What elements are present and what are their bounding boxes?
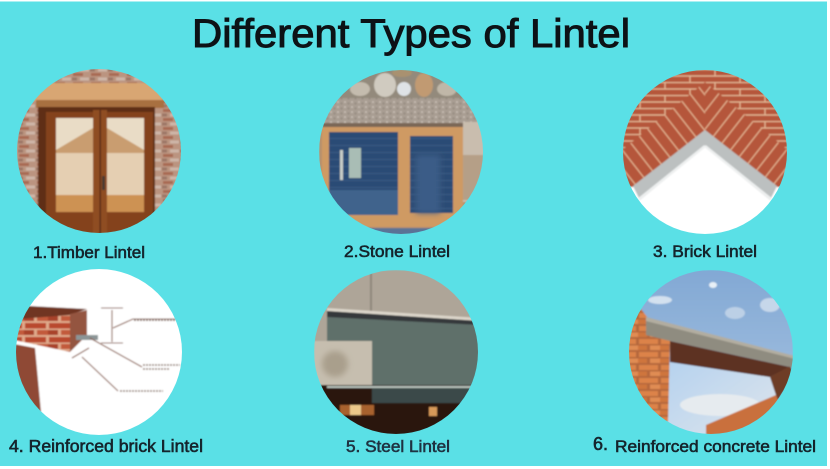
left chevron bricks [623, 82, 706, 188]
label: reinforced brick lintel: 4. Reinforced brick Lintel [9, 436, 203, 456]
photo: brick chevron lintel [623, 70, 787, 234]
label: brick lintel: 3. Brick Lintel [653, 242, 757, 261]
glass right [106, 128, 145, 154]
photo: timber door with lintel [15, 67, 185, 240]
steel angle [633, 130, 777, 200]
label number: 6. [593, 434, 608, 454]
right chevron bricks [704, 82, 787, 188]
glass left [55, 128, 94, 154]
label: stone lintel: 2.Stone Lintel [344, 242, 450, 261]
label: steel lintel: 5. Steel Lintel [346, 437, 450, 456]
photo: steel beam [314, 270, 484, 435]
label: reinforced concrete lintel: Reinforced concrete Lintel [615, 437, 816, 456]
panel: reinforced brick lintel [9, 268, 203, 456]
panel: timber lintel [15, 67, 185, 262]
title: Different Types of Lintel [192, 12, 630, 56]
photo: concrete lintel against sky [625, 270, 795, 440]
dimension marks [72, 308, 176, 391]
brick pier [625, 309, 670, 422]
wall courses [623, 70, 787, 151]
brick beam side [70, 310, 87, 352]
panel: reinforced concrete lintel [593, 270, 816, 456]
photo: reinforced brick diagram [14, 268, 183, 436]
brick beam top [18, 306, 87, 319]
panel: steel lintel [314, 270, 484, 456]
label: timber lintel: 1.Timber Lintel [33, 243, 145, 262]
brick beam front [14, 313, 70, 352]
panel: stone lintel [319, 69, 485, 261]
photo: stone lintel window [319, 69, 485, 238]
brick wall lower [705, 394, 778, 434]
lower wall [14, 344, 41, 412]
opening sky [668, 362, 776, 440]
underside of lintel [670, 341, 790, 377]
panel: brick lintel [623, 70, 787, 258]
concrete lintel [646, 317, 795, 368]
